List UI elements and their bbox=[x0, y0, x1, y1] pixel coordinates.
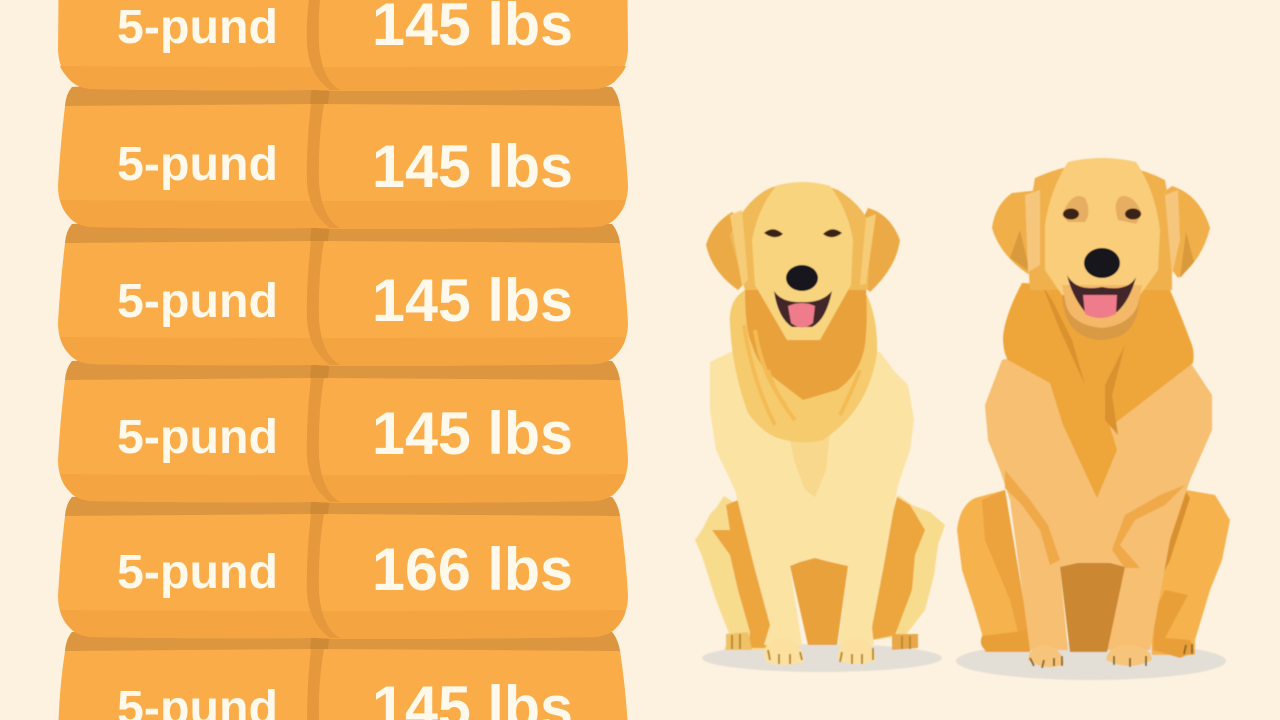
bag row 4: 145 lbs bbox=[372, 400, 573, 467]
rear haunch left bbox=[957, 490, 1030, 652]
ear left bbox=[706, 212, 748, 290]
ground shadow bbox=[702, 644, 942, 672]
bag row 3 bbox=[58, 220, 628, 366]
bag row 5: 166 lbs bbox=[372, 536, 573, 603]
chin bbox=[1062, 290, 1140, 340]
bag row 5 bbox=[58, 493, 628, 639]
front paws bbox=[764, 638, 804, 665]
bag row 5: 5-pund bbox=[117, 546, 278, 599]
ground shadow bbox=[956, 642, 1226, 680]
mouth bbox=[774, 291, 832, 327]
inner mane bbox=[745, 290, 867, 400]
face bbox=[1045, 158, 1160, 295]
body and front legs bbox=[985, 350, 1212, 650]
bag row 4 bbox=[58, 357, 628, 503]
ear right bbox=[858, 208, 900, 292]
bag row 3: 5-pund bbox=[117, 275, 278, 328]
front paws bbox=[1028, 645, 1064, 667]
ear left bbox=[992, 190, 1040, 274]
head fur bbox=[1026, 163, 1172, 290]
tongue bbox=[788, 303, 815, 328]
head fur bbox=[730, 182, 870, 290]
rear paws bbox=[726, 632, 752, 650]
bag row 2: 5-pund bbox=[117, 138, 278, 191]
mane streaks bbox=[744, 325, 860, 425]
chest fur edges bbox=[1005, 470, 1060, 565]
belly gap bbox=[1060, 563, 1125, 652]
bag row 1 bbox=[58, 0, 628, 91]
mane tail bbox=[788, 430, 830, 497]
face bbox=[752, 182, 853, 340]
bag row 2: 145 lbs bbox=[372, 133, 573, 200]
belly gap bbox=[790, 558, 848, 645]
ear highlights bbox=[1025, 190, 1040, 272]
outer mane bbox=[730, 290, 877, 442]
bag row 1: 5-pund bbox=[117, 1, 278, 54]
rear haunch left bbox=[695, 496, 771, 650]
rear haunch right bbox=[1150, 490, 1230, 655]
rear haunch right bbox=[870, 495, 945, 640]
mouth bbox=[1067, 275, 1136, 312]
mane shadow lines bbox=[1042, 285, 1125, 435]
dog: smaller golden retriever bbox=[695, 182, 945, 672]
eyes bbox=[1063, 208, 1079, 220]
ear right bbox=[1160, 186, 1210, 278]
nose bbox=[786, 265, 818, 291]
ear highlights bbox=[730, 210, 748, 286]
bag row 2 bbox=[58, 83, 628, 229]
bag row 3: 145 lbs bbox=[372, 267, 573, 334]
bag row 6 bbox=[58, 628, 628, 720]
body and front legs bbox=[710, 350, 914, 645]
brows bbox=[1062, 196, 1142, 224]
tongue bbox=[1083, 295, 1117, 318]
nose bbox=[1084, 248, 1120, 278]
mane bbox=[1003, 283, 1194, 498]
bag row 4: 5-pund bbox=[117, 411, 278, 464]
eyes bbox=[764, 229, 842, 237]
dog: larger golden retriever bbox=[956, 158, 1230, 680]
